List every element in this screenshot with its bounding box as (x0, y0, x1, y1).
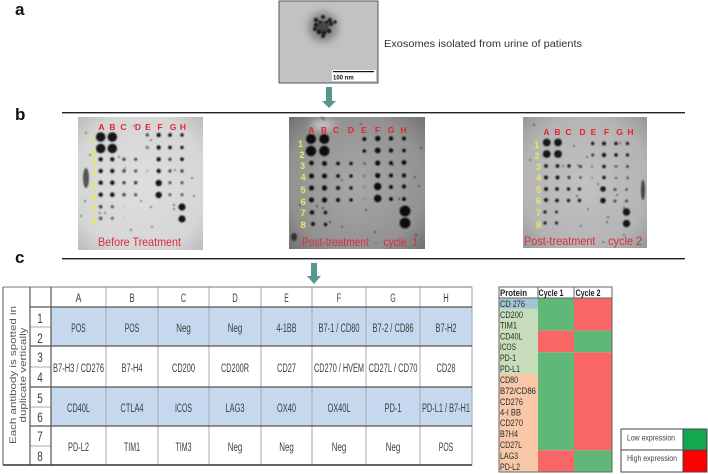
protein names: CD 276 (500, 299, 525, 309)
header row (500, 288, 601, 298)
protein names: PD-L2 (500, 462, 520, 472)
row numbers (37, 310, 43, 464)
panel: protein expression heatmap (499, 287, 612, 472)
panel: blot post-treatment cycle 2 (523, 117, 647, 248)
row numbers: 4 (300, 172, 306, 184)
row 1-2 labels: Neg (228, 323, 242, 335)
protein names: PD-L1 (500, 364, 520, 374)
dots (529, 124, 630, 236)
row 3-4 labels: CD28 (436, 363, 456, 375)
dots (299, 117, 422, 236)
panel label c: c (15, 248, 24, 267)
panel: antibody array map table (3, 287, 472, 465)
column headers: F (337, 293, 341, 305)
row numbers: 5 (37, 390, 43, 406)
row 3-4 labels: CD200R (221, 363, 249, 375)
row 5-6 labels: OX40L (328, 403, 351, 415)
row numbers: 1 (89, 135, 95, 146)
protein names: ICOS (500, 342, 516, 352)
row 5-6 labels: ICOS (175, 403, 192, 415)
protein names: CD27L (500, 440, 522, 450)
column headers: H (443, 293, 449, 305)
column headers (76, 293, 449, 305)
row numbers (534, 140, 542, 231)
row 5-6 labels: PD-1 (384, 403, 402, 415)
blot caption: Before Treatment (98, 235, 182, 249)
protein names (500, 299, 536, 472)
low expression swatch (683, 430, 706, 450)
row 7-8 labels (68, 442, 453, 454)
row numbers: 4 (536, 173, 542, 184)
row numbers: 8 (91, 216, 97, 227)
row numbers: 8 (536, 220, 541, 231)
row numbers: 3 (91, 157, 97, 168)
row 5-6 labels: PD-L1 / B7-H1 (422, 403, 470, 415)
row numbers: 7 (300, 208, 306, 219)
icon: exosome particle (313, 15, 337, 38)
column letters: G (388, 125, 395, 135)
protein names: CD276 (500, 397, 523, 407)
row numbers: 8 (300, 220, 306, 231)
panel: blot before treatment (78, 117, 203, 250)
protein names: LAG3 (500, 451, 518, 461)
row 1-2 labels: POS (125, 323, 139, 335)
column headers: B (130, 293, 135, 305)
row 1-2 labels: POS (71, 323, 86, 335)
column letters: H (627, 127, 634, 137)
protein names: PD-1 (500, 353, 516, 363)
column letters: D (348, 125, 354, 135)
row 5-6 labels (67, 403, 470, 415)
column letters: C (565, 127, 572, 137)
column letters: A (543, 127, 550, 137)
column letters: D (135, 122, 141, 132)
protein names: CD40L (500, 332, 523, 342)
legend: expression levels (621, 429, 707, 472)
row 7-8 labels: Neg (279, 442, 294, 454)
header row: Protein (500, 288, 527, 298)
row numbers: 6 (536, 196, 541, 207)
column letters: B (554, 127, 561, 137)
column headers: A (76, 293, 82, 305)
caption: exosomes: Exosomes isolated from urine of patients (384, 38, 582, 50)
row 1-2 labels: B7-H2 (436, 323, 456, 335)
column letters: B (321, 125, 327, 135)
row 7-8 labels: TIM3 (176, 442, 192, 454)
row numbers: 5 (300, 185, 306, 196)
column letters: C (120, 122, 127, 132)
row numbers (89, 135, 97, 227)
grid lines (3, 287, 472, 465)
row numbers: 2 (299, 150, 305, 161)
column letters: A (308, 125, 315, 135)
column headers: D (232, 293, 238, 305)
row 5-6 labels: CTLA4 (120, 403, 144, 415)
panel: exosome micrograph (279, 1, 378, 83)
heatmap frame (499, 287, 612, 472)
cycle 1 cells (538, 298, 574, 472)
side note (8, 306, 29, 444)
column letters: E (591, 127, 597, 137)
row numbers: 7 (536, 208, 541, 219)
column letters (543, 127, 634, 137)
row 3-4 labels: B7-H3 / CD276 (53, 363, 104, 375)
column letters: C (333, 125, 339, 135)
arrow: b to c (307, 263, 321, 284)
column letters: H (400, 125, 407, 135)
legend labels: High expression (627, 453, 677, 463)
shaded rows (51, 307, 472, 426)
row numbers: 3 (300, 161, 305, 172)
row numbers: 7 (91, 204, 97, 215)
column letters: E (145, 122, 151, 132)
column letters (98, 122, 186, 132)
row 7-8 labels: Neg (228, 442, 242, 454)
protein names: CD270 (500, 418, 523, 428)
arrow: a to b (322, 87, 336, 108)
row numbers: 4 (91, 169, 97, 180)
row 7-8 labels: Neg (332, 442, 346, 454)
column headers: G (390, 293, 396, 305)
column letters: F (375, 125, 380, 135)
row 1-2 labels (71, 323, 456, 335)
protein names: 4-I BB (500, 408, 521, 418)
row 1-2 labels: 4-1BB (276, 323, 297, 335)
header row: Cycle 2 (576, 288, 601, 298)
cycle 2 cells (574, 298, 612, 472)
column letters: B (109, 122, 116, 132)
row 7-8 labels: Neg (386, 442, 400, 454)
side note: Each antibody is spotted in (8, 306, 19, 444)
column headers: E (284, 293, 289, 305)
row numbers: 6 (300, 197, 306, 208)
row 5-6 labels: OX40 (277, 403, 296, 415)
row 1-2 labels: B7-1 / CD80 (318, 323, 360, 335)
column letters: F (604, 127, 609, 137)
header row: Cycle 1 (538, 288, 564, 298)
row 3-4 labels: CD27 (277, 363, 296, 375)
column letters (308, 125, 407, 135)
row numbers: 1 (298, 139, 304, 150)
column letters: D (579, 127, 586, 137)
column letters: H (180, 122, 186, 132)
row 1-2 labels: B7-2 / CD86 (372, 323, 414, 335)
row numbers: 3 (37, 349, 43, 365)
row numbers: 1 (37, 310, 43, 326)
row 7-8 labels: TIM1 (124, 442, 140, 454)
blot caption: Post-treatment - cycle 1 (302, 235, 418, 249)
row numbers: 2 (37, 330, 43, 346)
row numbers: 6 (91, 193, 97, 204)
column headers: C (181, 293, 186, 305)
row numbers: 2 (534, 151, 540, 162)
protein names: CD80 (500, 375, 518, 385)
row 7-8 labels: PD-L2 (68, 442, 89, 454)
protein names: B7H4 (500, 429, 518, 439)
row numbers: 1 (534, 140, 540, 151)
legend labels (627, 432, 677, 463)
row 3-4 labels: B7-H4 (122, 363, 143, 375)
row numbers: 7 (37, 428, 43, 444)
panel label a: a (15, 0, 25, 19)
protein names: CD200 (500, 310, 523, 320)
high expression swatch (683, 450, 706, 472)
side note: duplicate vertically (18, 327, 29, 422)
column letters: E (361, 125, 367, 135)
row numbers: 6 (37, 409, 43, 425)
column letters: G (170, 122, 177, 132)
protein label shading (499, 298, 538, 472)
row numbers: 3 (536, 162, 541, 173)
row 1-2 labels: Neg (176, 323, 191, 335)
row numbers: 2 (91, 147, 97, 158)
scale bar: 100 nm (333, 76, 354, 82)
legend labels: Low expression (627, 432, 675, 442)
row 3-4 labels: CD200 (172, 363, 195, 375)
protein names: TIM1 (500, 320, 517, 330)
blot caption: Post-treatment - cycle 2 (524, 234, 642, 248)
row 7-8 labels: POS (439, 442, 453, 454)
row 3-4 labels: CD270 / HVEM (314, 363, 364, 375)
row numbers: 4 (37, 369, 43, 385)
row numbers: 5 (536, 185, 542, 196)
row 3-4 labels: CD27L / CD70 (368, 363, 418, 375)
panel label b: b (15, 105, 25, 124)
column letters: A (98, 122, 105, 132)
panel: blot post-treatment cycle 1 (289, 117, 425, 249)
row numbers: 5 (91, 181, 97, 192)
column letters: F (157, 122, 163, 132)
row 5-6 labels: CD40L (67, 403, 90, 415)
row numbers: 8 (37, 448, 43, 464)
row 3-4 labels (53, 363, 456, 375)
row numbers (298, 139, 306, 231)
dots (80, 125, 195, 231)
protein names: B72/CD86 (500, 386, 536, 396)
column letters: G (616, 127, 623, 137)
row 5-6 labels: LAG3 (226, 403, 244, 415)
